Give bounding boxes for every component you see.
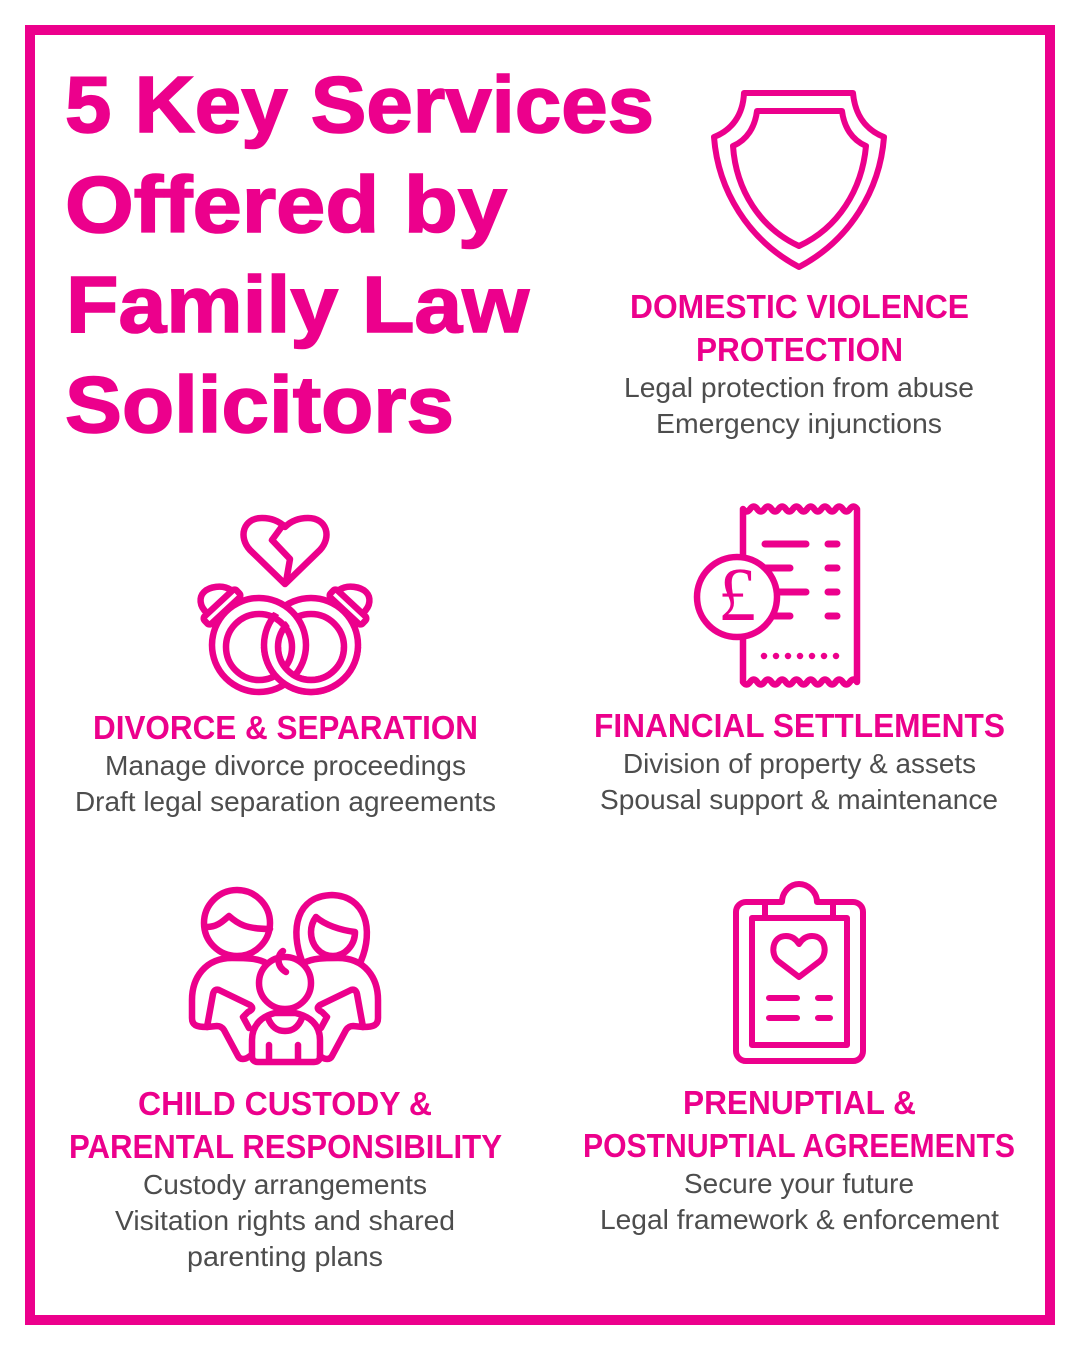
text: divorce details: Draft legal separation agreements	[75, 786, 496, 817]
text: financial details	[600, 748, 998, 815]
text: prenuptial details: Secure your future	[684, 1168, 914, 1199]
text: divorce details: Manage divorce proceedings	[105, 750, 466, 781]
heading: prenuptial agreements: POSTNUPTIAL AGREEMENTS	[583, 1127, 1015, 1164]
panel: financial settlements	[594, 506, 1005, 815]
icon: receipt with pound coin: £	[718, 553, 756, 637]
heading: child custody: PARENTAL RESPONSIBILITY	[69, 1128, 502, 1165]
panel: prenuptial agreements	[583, 884, 1015, 1235]
heading: child custody: CHILD CUSTODY &	[138, 1085, 432, 1122]
text: prenuptial details	[600, 1168, 999, 1235]
heading: domestic violence protection: PROTECTION	[696, 331, 903, 368]
title	[65, 60, 654, 449]
text: domestic violence details: Legal protection from abuse	[624, 372, 974, 403]
title: Offered by	[65, 160, 508, 249]
title: Family Law	[66, 260, 530, 349]
text: child custody details: Visitation rights and shared	[115, 1205, 455, 1236]
text: child custody details: Custody arrangements	[143, 1169, 427, 1200]
title: 5 Key Services	[65, 60, 654, 149]
text: child custody details: parenting plans	[187, 1241, 383, 1272]
text: domestic violence details	[624, 372, 974, 439]
icon: clipboard with heart	[736, 884, 863, 1061]
icon: receipt with pound coin	[697, 506, 857, 684]
heading: financial settlements: FINANCIAL SETTLEMENTS	[594, 707, 1005, 744]
panel: domestic violence protection	[624, 93, 974, 439]
heading: child custody	[69, 1085, 502, 1165]
icon: shield	[714, 93, 884, 267]
heading: divorce and separation: DIVORCE & SEPARATION	[93, 709, 478, 746]
heading: domestic violence protection: DOMESTIC VIOLENCE	[630, 288, 969, 325]
panel: divorce and separation	[75, 518, 496, 817]
text: financial details: Division of property & assets	[623, 748, 976, 779]
heading: prenuptial agreements: PRENUPTIAL &	[683, 1084, 916, 1121]
title: Solicitors	[65, 360, 454, 449]
heading: prenuptial agreements	[583, 1084, 1015, 1164]
icon: family	[192, 890, 378, 1062]
text: divorce details	[75, 750, 496, 817]
text: child custody details	[115, 1169, 455, 1272]
text: financial details: Spousal support & maintenance	[600, 784, 998, 815]
icon: broken heart and rings	[201, 518, 369, 692]
panel: child custody	[69, 890, 502, 1272]
text: domestic violence details: Emergency injunctions	[656, 408, 942, 439]
heading: domestic violence protection	[630, 288, 969, 368]
text: prenuptial details: Legal framework & enforcement	[600, 1204, 999, 1235]
